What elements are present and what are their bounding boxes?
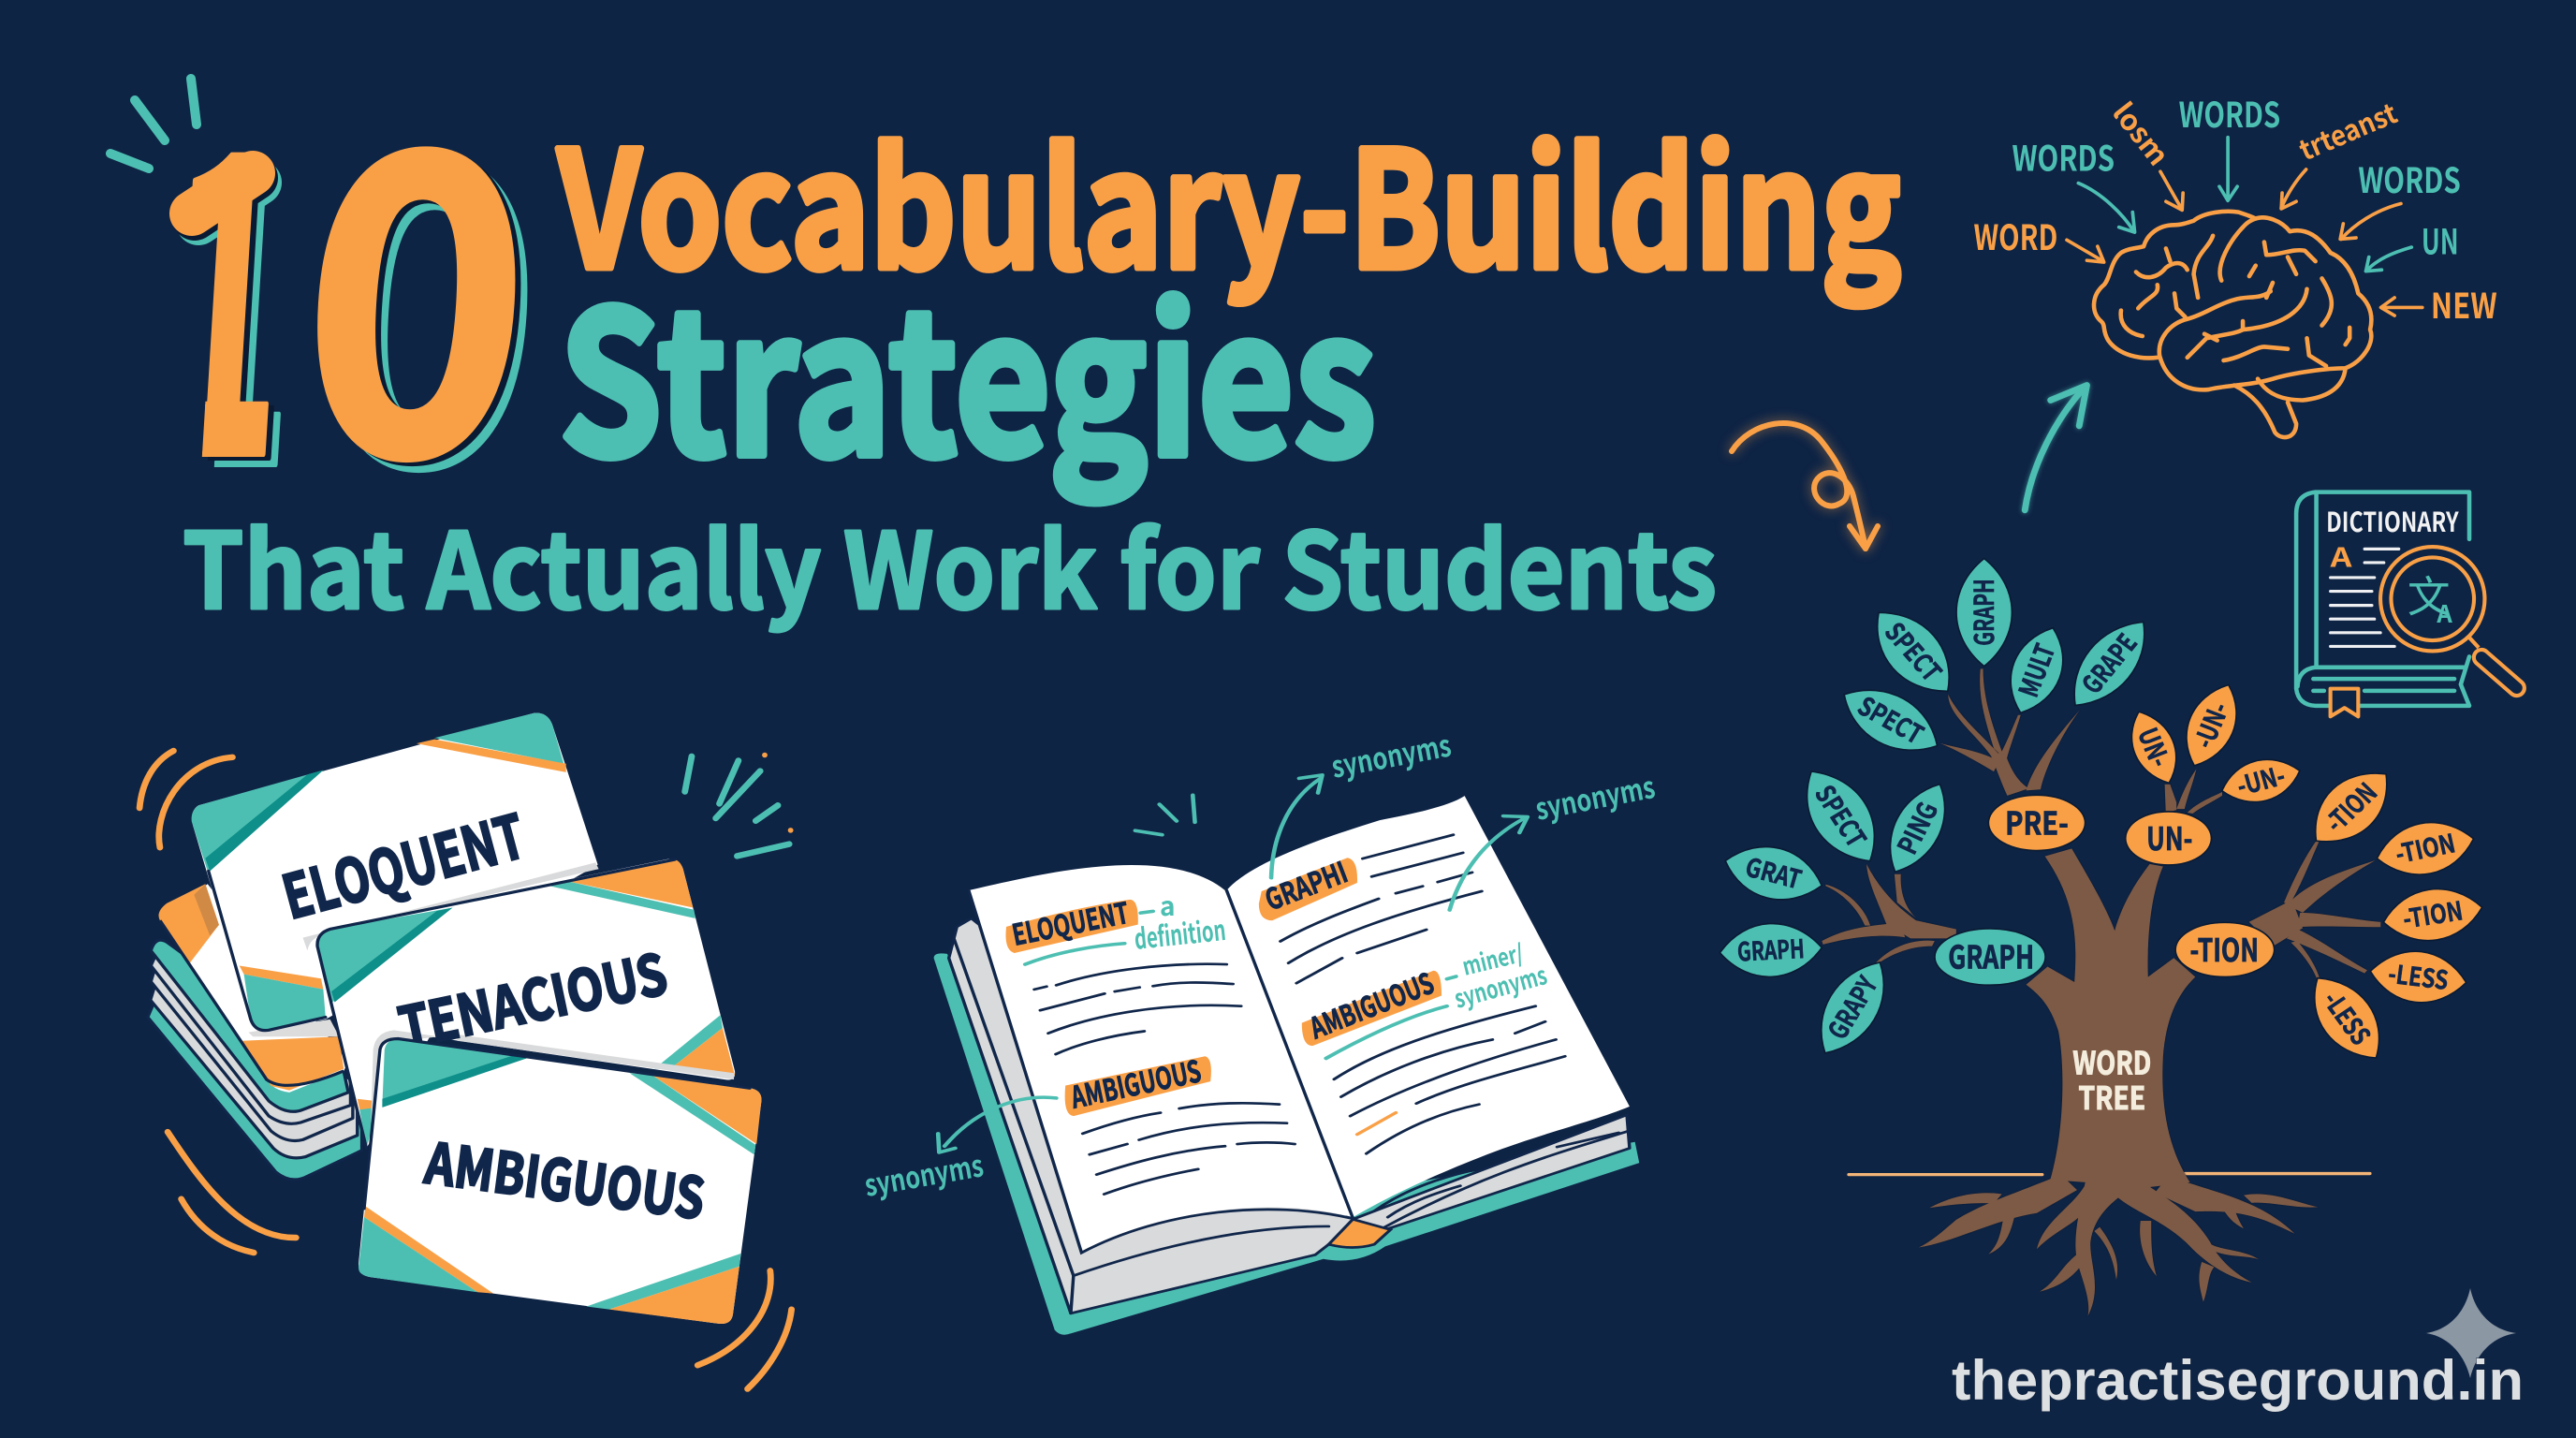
letter A: A xyxy=(2329,537,2353,576)
website label: thepractiseground.in xyxy=(1952,1349,2524,1412)
label: NEW: NEW xyxy=(2431,278,2497,329)
page block xyxy=(949,918,1630,1313)
card stack behind xyxy=(148,884,362,1180)
annotation: synonyms right: synonyms xyxy=(1531,764,1659,829)
teal leaves: SPECT xyxy=(1807,777,1877,854)
flashcards illustration xyxy=(139,713,794,1389)
dictionary label: DICTIONARY xyxy=(2326,501,2459,540)
highlighted word: AMBIGUOUS right: AMBIGUOUS xyxy=(1302,960,1440,1048)
highlighted word: GRAPHI: GRAPHI xyxy=(1258,849,1353,918)
orange leaves: -LESS xyxy=(2315,983,2381,1051)
flashcard: TENACIOUS xyxy=(317,859,735,1149)
big number 10: 0 xyxy=(300,0,561,584)
motion arcs and sparks around cards xyxy=(139,751,794,1389)
trunk label: WORD xyxy=(2072,1039,2151,1084)
annotation: miner/: miner/ xyxy=(1458,934,1527,983)
root oval: -TION: -TION xyxy=(2190,926,2259,972)
annotation: synonyms top: synonyms xyxy=(1327,723,1455,787)
card word: AMBIGUOUS: AMBIGUOUS xyxy=(420,1118,710,1236)
arrow: swirly orange arrow to tree xyxy=(1732,423,1878,549)
orange leaves: -UN- xyxy=(2183,697,2237,754)
annotation: synonyms inner: synonyms xyxy=(1450,955,1550,1016)
root oval: UN- xyxy=(2126,812,2212,865)
book cover xyxy=(934,953,1639,1335)
label: WORD: WORD xyxy=(1973,210,2057,260)
title block xyxy=(106,74,1902,633)
teal leaves: GRAPE xyxy=(2071,625,2145,700)
translate glyph: 文 xyxy=(2408,563,2450,624)
big number 10: 1 xyxy=(160,0,318,584)
orange leaves: -TION xyxy=(2400,890,2466,936)
orange leaves: -TION xyxy=(2316,773,2385,840)
right page xyxy=(1226,796,1630,1217)
big number 10 xyxy=(169,146,528,474)
highlight marks xyxy=(1005,858,1442,1116)
root oval: GRAPH xyxy=(1935,929,2045,985)
teal leaves: PING xyxy=(1886,795,1946,859)
teal annotation arrows and sparks xyxy=(938,775,1528,1152)
label: WORDS right: WORDS xyxy=(2358,153,2461,203)
annotation: synonyms left: synonyms xyxy=(861,1142,987,1206)
ground line xyxy=(1849,1174,2370,1175)
title line: Vocabulary-Building: Vocabulary-Building xyxy=(557,81,1901,315)
left page xyxy=(969,865,1353,1253)
label: losm: losm xyxy=(2104,93,2180,173)
teal leaves: MULT xyxy=(2008,638,2064,701)
teal leaves: GRAPH xyxy=(1963,579,2002,646)
teal leaves: GRAPY xyxy=(1817,968,1886,1046)
card word: ELOQUENT: ELOQUENT xyxy=(272,789,534,936)
highlighted word: ELOQUENT: ELOQUENT xyxy=(1008,889,1132,954)
book outline xyxy=(2296,492,2469,706)
text lines xyxy=(1034,835,1565,1195)
teal leaves: GRAT xyxy=(1742,847,1807,897)
arrow: teal arrow from tree to brain xyxy=(2025,386,2086,510)
card word: TENACIOUS: TENACIOUS xyxy=(391,930,673,1065)
dictionary icon xyxy=(2296,492,2527,716)
arrows into brain xyxy=(2067,138,2422,315)
label: WORDS left: WORDS xyxy=(2012,130,2115,181)
teal leaves: GRAPH xyxy=(1736,929,1806,969)
trunk label xyxy=(2072,1039,2151,1120)
flashcard: AMBIGUOUS xyxy=(359,1038,761,1324)
teal leaves: SPECT xyxy=(1877,613,1952,689)
orange accent line xyxy=(1357,1113,1396,1135)
label: trteanst: trteanst xyxy=(2292,91,2403,169)
magnifying glass xyxy=(2380,547,2527,698)
ribbon xyxy=(1328,1219,1390,1248)
orange leaves xyxy=(2120,677,2486,1072)
root oval: GRAPH: GRAPH xyxy=(1948,933,2034,978)
decorative sparks: top-left xyxy=(110,79,197,169)
root oval: UN-: UN- xyxy=(2146,814,2192,860)
entry lines xyxy=(2331,549,2399,646)
annotation: definition: definition xyxy=(1132,907,1227,958)
trunk label: TREE xyxy=(2078,1074,2145,1120)
brain outline xyxy=(2094,212,2371,437)
orange leaves: UN- xyxy=(2130,722,2181,772)
flashcard: ELOQUENT xyxy=(192,713,599,1036)
translate glyph: A xyxy=(2436,595,2452,630)
root oval: -TION xyxy=(2175,922,2275,976)
teal leaves: SPECT xyxy=(1852,686,1931,752)
label: WORDS top: WORDS xyxy=(2179,87,2280,138)
teal leaves xyxy=(1719,558,2162,1065)
title line: Strategies: Strategies xyxy=(559,226,1376,513)
label: UN: UN xyxy=(2422,213,2459,264)
orange leaves: -LESS xyxy=(2386,954,2451,998)
subtitle: That Actually Work for Students xyxy=(183,488,1717,639)
word tree xyxy=(1719,558,2486,1315)
bookmark xyxy=(2331,689,2358,716)
sparkle watermark star xyxy=(2426,1288,2516,1378)
highlighted word: AMBIGUOUS left: AMBIGUOUS xyxy=(1066,1048,1205,1118)
root oval: PRE-: PRE- xyxy=(2005,799,2069,844)
orange leaves: -TION xyxy=(2392,823,2458,872)
orange leaves: -UN- xyxy=(2232,756,2289,803)
brain with words xyxy=(1973,87,2497,437)
page edges and spine xyxy=(954,890,1627,1313)
root oval: PRE- xyxy=(1988,795,2086,851)
annotation: a: a xyxy=(1160,887,1176,924)
trunk, branches and roots xyxy=(1822,668,2380,1315)
open book illustration xyxy=(861,723,1659,1335)
